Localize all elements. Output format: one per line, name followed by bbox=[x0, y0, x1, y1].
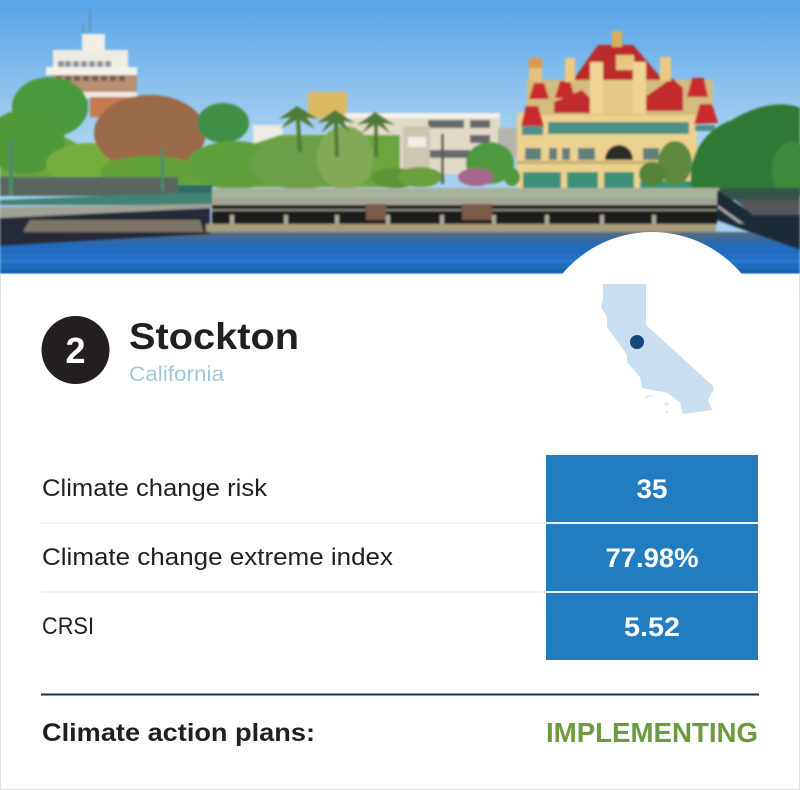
trees bbox=[0, 77, 800, 198]
row: CRSI: 5.52 bbox=[624, 612, 680, 642]
photo: Stockton waterfront skyline bbox=[0, 0, 800, 274]
row: CRSI: CRSI bbox=[42, 613, 94, 640]
icon: California map with location dot bbox=[601, 284, 714, 414]
subheading: state: California bbox=[129, 363, 224, 386]
footer: climate action plans label: Climate action plans: bbox=[42, 719, 315, 747]
bridge bbox=[206, 188, 719, 232]
table: climate metrics bbox=[41, 455, 758, 660]
left tower building bbox=[46, 9, 137, 117]
rank badge: 2 bbox=[65, 330, 86, 371]
white card bbox=[0, 274, 800, 790]
river bbox=[0, 232, 800, 274]
mid buildings bbox=[253, 92, 518, 184]
row: climate change risk bbox=[42, 455, 758, 522]
row: climate change extreme index bbox=[42, 524, 758, 591]
row: climate change extreme index: Climate change extreme index bbox=[42, 544, 393, 571]
row: climate change risk: 35 bbox=[636, 474, 668, 504]
row: climate change extreme index: 77.98% bbox=[606, 543, 698, 573]
mansion bbox=[517, 31, 718, 189]
row: climate change risk: Climate change risk bbox=[42, 475, 268, 502]
rank badge bbox=[42, 316, 110, 384]
footer: status value: IMPLEMENTING bbox=[546, 717, 758, 748]
map badge circle bbox=[535, 232, 769, 466]
heading: city name: Stockton bbox=[129, 316, 299, 357]
row: CRSI bbox=[42, 593, 758, 660]
left promenade and seawall bbox=[0, 140, 212, 246]
right embankment bbox=[717, 188, 800, 250]
